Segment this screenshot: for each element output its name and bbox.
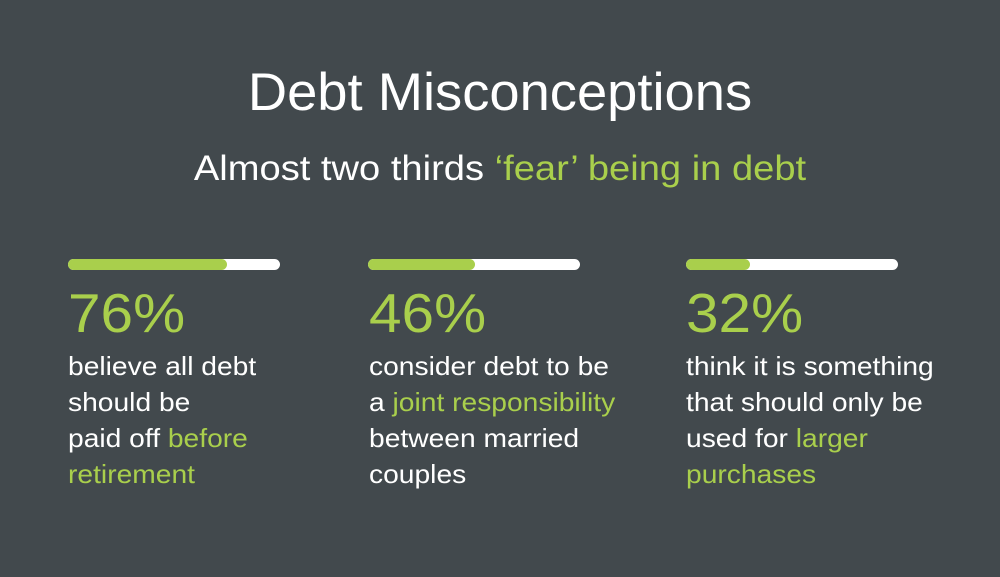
- text: 76% description: [68, 351, 256, 489]
- stat: 46%: 46%: [369, 282, 486, 344]
- text: 32% description: think it is something: [686, 351, 934, 381]
- text: 32% description: that should only be: [686, 387, 923, 417]
- text: 46% description: consider debt to be: [369, 351, 609, 381]
- text: 32% description: used for larger: [686, 423, 868, 453]
- text: 32% description: [686, 351, 934, 489]
- subtitle: Almost two thirds ‘fear’ being in debt: [194, 149, 806, 188]
- title: Debt Misconceptions: [248, 63, 752, 122]
- text: 76% description: paid off before: [68, 423, 248, 453]
- text: 46% description: couples: [369, 459, 466, 489]
- text: 46% description: [369, 351, 616, 489]
- text: 76% description: retirement: [68, 459, 195, 489]
- progress bar: 76%: [68, 259, 280, 270]
- stat: 76%: 76%: [68, 282, 185, 344]
- progress bar: 46%: [368, 259, 580, 270]
- progress bar: 32%: [686, 259, 898, 270]
- stat: 32%: 32%: [686, 282, 803, 344]
- text: 32% description: purchases: [686, 459, 816, 489]
- text: 46% description: a joint responsibility: [369, 387, 615, 417]
- text: 46% description: between married: [369, 423, 579, 453]
- text: 76% description: should be: [68, 387, 190, 417]
- text: 76% description: believe all debt: [68, 351, 256, 381]
